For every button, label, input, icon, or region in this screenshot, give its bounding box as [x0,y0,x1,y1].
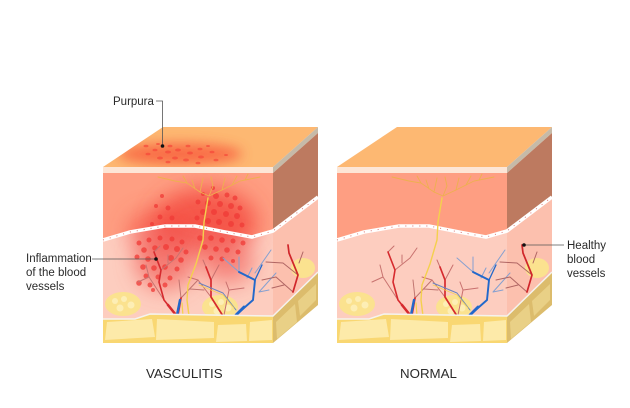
blood vessels [138,198,303,316]
purpura redness [118,143,242,165]
side dermis [507,197,552,316]
side dermis [273,197,318,316]
fat layer [337,272,552,343]
side epidermis [273,133,318,233]
epidermis [103,173,273,240]
epidermis [337,173,507,240]
back top edge [507,127,552,173]
callout: inflammation of the blood vessels: vessels [26,281,65,293]
basement membrane [337,197,552,240]
light band [103,167,273,173]
top skin surface [337,127,552,167]
fat lobes [339,292,375,316]
callout: purpura [113,96,164,148]
callout: healthy blood vessels: vessels [567,268,606,280]
panel: normal skin block [337,127,552,343]
nerve [392,174,494,196]
fat layer [103,272,318,343]
callout: healthy blood vessels: Healthy [567,240,606,252]
caption: normal: NORMAL [400,366,457,381]
callout: healthy blood vessels: blood [567,254,595,266]
caption: vasculitis: VASCULITIS [146,366,223,381]
callout: purpura: Purpura [113,96,155,108]
panel: vasculitis skin block [103,127,318,343]
basement membrane [103,197,318,240]
inflammation glow and dots [127,186,257,292]
back top edge [273,127,318,173]
dermis [103,226,273,319]
callout: healthy blood vessels [522,240,606,280]
callout: inflammation of the blood vessels: of the blood [26,267,86,279]
top skin surface [103,127,318,167]
nerve [158,174,260,196]
light band [337,167,507,173]
dermis [337,226,507,319]
side epidermis [507,133,552,233]
callout: inflammation of the blood vessels [26,253,158,293]
blood vessels [372,198,537,316]
fat lobes [105,292,141,316]
callout: inflammation of the blood vessels: Inflammation [26,253,92,265]
